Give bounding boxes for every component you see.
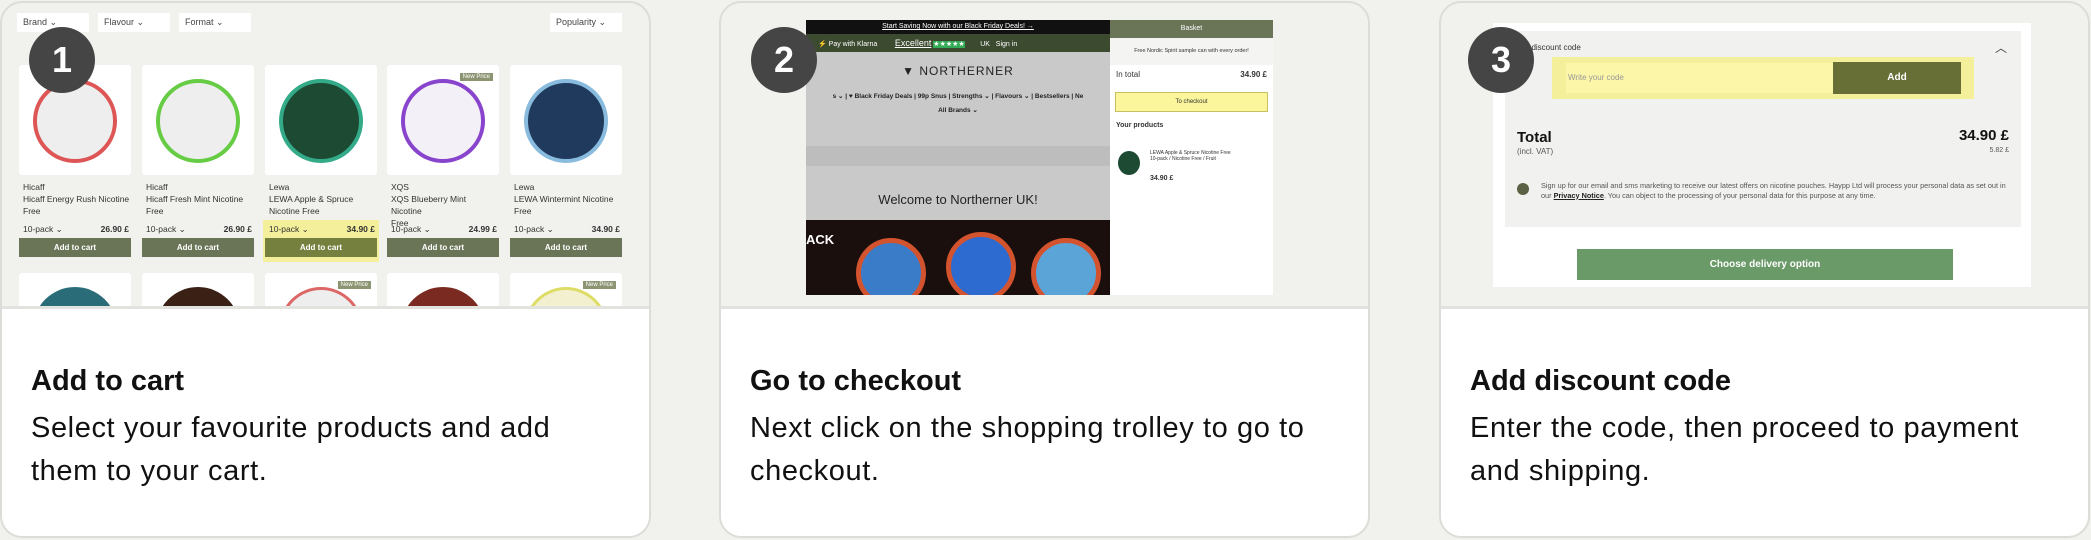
product grid row 1: Add to cart <box>422 243 464 252</box>
step number 1 <box>29 27 95 93</box>
panel: step 1 add to cart <box>0 1 651 538</box>
basket panel: In total <box>1116 70 1140 79</box>
product grid row 1: New Price <box>463 74 490 80</box>
product grid row 1: 26.90 £ <box>101 224 129 234</box>
product grid row 1: Free <box>391 218 408 228</box>
product grid row 1: 34.90 £ <box>347 224 375 234</box>
text block: Select your favourite products and add them to your cart. <box>31 412 550 487</box>
step number 1: 1 <box>52 39 72 80</box>
step number 3: 3 <box>1491 39 1511 80</box>
product grid row 1: Add to cart <box>300 243 342 252</box>
discount input highlighted <box>1552 57 1974 99</box>
screenshot: store with basket: ⚡ Pay with Klarna Excellent ★★★★★ UK Sign in <box>818 38 1017 48</box>
product grid row 1: Add to cart <box>545 243 587 252</box>
filter dropdowns <box>17 13 622 32</box>
screenshot: store with basket: ▼ NORTHERNER <box>902 64 1014 78</box>
basket panel <box>1110 20 1273 295</box>
basket panel: Your products <box>1116 122 1163 129</box>
screenshot: discount code form: Add discount code <box>1515 43 1581 52</box>
product grid row 1: XQS Blueberry Mint Nicotine <box>391 194 466 216</box>
product grid row 1: 26.90 £ <box>224 224 252 234</box>
product grid row 1 <box>19 65 622 262</box>
product grid row 1: Free <box>146 206 163 216</box>
choose delivery button <box>1577 249 1953 280</box>
screenshot: discount code form: 34.90 £ <box>1959 127 2009 144</box>
product grid row 1: 34.90 £ <box>592 224 620 234</box>
product grid row 1: 24.99 £ <box>469 224 497 234</box>
product grid row 2: New Price <box>586 282 613 288</box>
product grid row 1: Lewa <box>514 182 534 192</box>
text block <box>1441 306 2088 540</box>
product grid row 1: Add to cart <box>54 243 96 252</box>
step number 2: 2 <box>774 39 794 80</box>
panel: step 3 add discount code <box>1439 1 2090 538</box>
text block: Enter the code, then proceed to payment and shipping. <box>1470 412 2019 487</box>
product grid row 1: 10-pack ⌄ <box>269 224 309 234</box>
text block <box>2 306 649 540</box>
product grid row 1: Hicaff <box>23 182 45 192</box>
screenshot: discount code form: (incl. VAT) <box>1517 147 1553 156</box>
choose delivery button: Choose delivery option <box>1710 259 1820 270</box>
product grid row 2 <box>19 273 622 306</box>
text block: Add to cart <box>31 365 184 397</box>
basket panel: 34.90 £ <box>1240 70 1267 79</box>
screenshot: discount code form: 5.82 £ <box>1990 147 2009 154</box>
product grid row 1: LEWA Apple & Spruce <box>269 194 353 204</box>
basket panel: Basket <box>1181 25 1202 32</box>
discount input highlighted: Add <box>1887 72 1907 83</box>
screenshot: store with basket: Welcome to Northerner UK! <box>878 192 1038 207</box>
basket panel: 10-pack / Nicotine Free / Fruit <box>1150 156 1216 162</box>
screenshot: discount code form: Sign up for our email and sms marketing to receive our latest offers on nicotine pouches. Haypp Ltd will process your personal data as set out in our Privacy Notice. You can object to the processing of your personal data for this purpose at any time. <box>1541 181 2006 200</box>
product grid row 1: Hicaff <box>146 182 168 192</box>
product grid row 1: Hicaff Fresh Mint Nicotine <box>146 194 243 204</box>
product grid row 1: 10-pack ⌄ <box>146 224 186 234</box>
product grid row 1: Nicotine Free <box>269 206 320 216</box>
product grid row 2: New Price <box>341 282 368 288</box>
step number 2 <box>751 27 817 93</box>
text block: Next click on the shopping trolley to go to checkout. <box>750 412 1305 487</box>
product grid row 1: Add to cart <box>177 243 219 252</box>
screenshot: store with basket: ACK <box>806 232 834 247</box>
product grid row 1: 10-pack ⌄ <box>391 224 431 234</box>
discount input highlighted: Write your code <box>1568 73 1624 82</box>
screenshot: product listing: Brand ⌄ <box>23 17 57 27</box>
screenshot: store with basket: s ⌄ | ♥ Black Friday Deals | 99p Snus | Strengths ⌄ | Flavours ⌄ | Bestsellers | Ne <box>833 93 1083 100</box>
screenshot: discount code form: ︿ <box>1995 41 2007 55</box>
screenshot: product listing: Format ⌄ <box>185 17 224 27</box>
screenshot: product listing <box>17 13 622 306</box>
text block <box>721 306 1368 540</box>
screenshot: store with basket: All Brands ⌄ <box>938 107 978 114</box>
product grid row 1: 10-pack ⌄ <box>23 224 63 234</box>
panel: step 2 go to checkout <box>719 1 1370 538</box>
product grid row 1: Hicaff Energy Rush Nicotine <box>23 194 129 204</box>
product grid row 1: Lewa <box>269 182 289 192</box>
basket panel: LEWA Apple & Spruce Nicotine Free <box>1150 150 1231 156</box>
screenshot: product listing: Popularity ⌄ <box>556 17 606 27</box>
basket panel: Free Nordic Spirit sample can with every order! <box>1134 48 1249 54</box>
screenshot: store with basket: Start Saving Now with our Black Friday Deals! → <box>882 23 1034 30</box>
text block: Go to checkout <box>750 365 961 397</box>
basket panel: To checkout <box>1175 99 1208 105</box>
product grid row 1: Free <box>514 206 531 216</box>
product grid row 1: Free <box>23 206 40 216</box>
product grid row 1: LEWA Wintermint Nicotine <box>514 194 613 204</box>
screenshot: discount code form: Total <box>1517 129 1552 146</box>
step number 3 <box>1468 27 1534 93</box>
product grid row 1: XQS <box>391 182 409 192</box>
basket panel: 34.90 £ <box>1150 175 1173 182</box>
screenshot: product listing: Flavour ⌄ <box>104 17 144 27</box>
product grid row 1: 10-pack ⌄ <box>514 224 554 234</box>
text block: Add discount code <box>1470 365 1731 397</box>
screenshot: discount code form <box>1493 23 2031 287</box>
screenshot: store with basket <box>806 20 1273 295</box>
